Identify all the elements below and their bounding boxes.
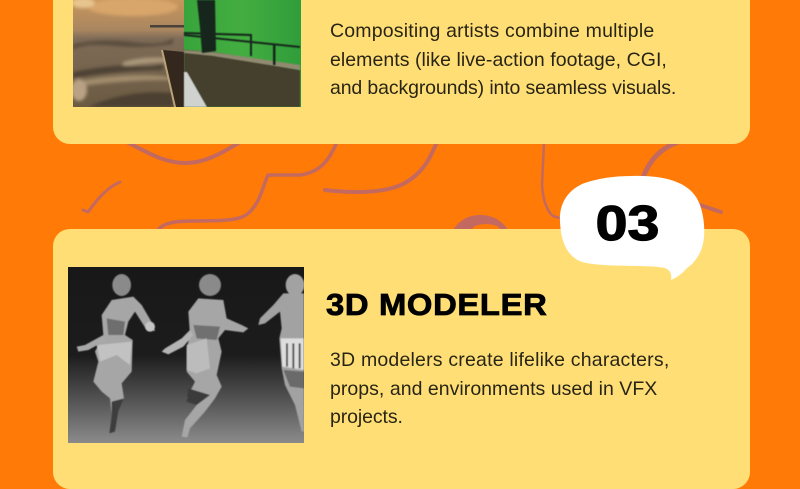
image: compositing before and after: [73, 0, 301, 107]
text: compositing description: and backgrounds) into seamless visuals.: [330, 77, 676, 99]
text: compositing description: [330, 20, 676, 99]
text: compositing description: Compositing artists combine multiple: [330, 20, 654, 42]
figure: left sculpt: [77, 274, 155, 433]
number 03: 03: [596, 197, 659, 251]
panel: compositing artist: [53, 0, 750, 144]
image: 3D character sculpts: [68, 267, 304, 443]
text: 3D modeler description: projects.: [330, 406, 403, 428]
text: 3D modeler description: 3D modelers create lifelike characters,: [330, 349, 669, 371]
speech bubble: number 03: [560, 176, 704, 280]
text: compositing description: elements (like live-action footage, CGI,: [330, 48, 667, 70]
panel: 3D modeler: [53, 229, 750, 489]
text: 3D modeler description: props, and environments used in VFX: [330, 378, 657, 400]
heading: 3D modeler: 3D MODELER: [326, 288, 547, 322]
figure: right sculpt: [258, 274, 304, 432]
text: 3D modeler description: [330, 349, 669, 428]
figure: middle sculpt: [162, 274, 248, 438]
